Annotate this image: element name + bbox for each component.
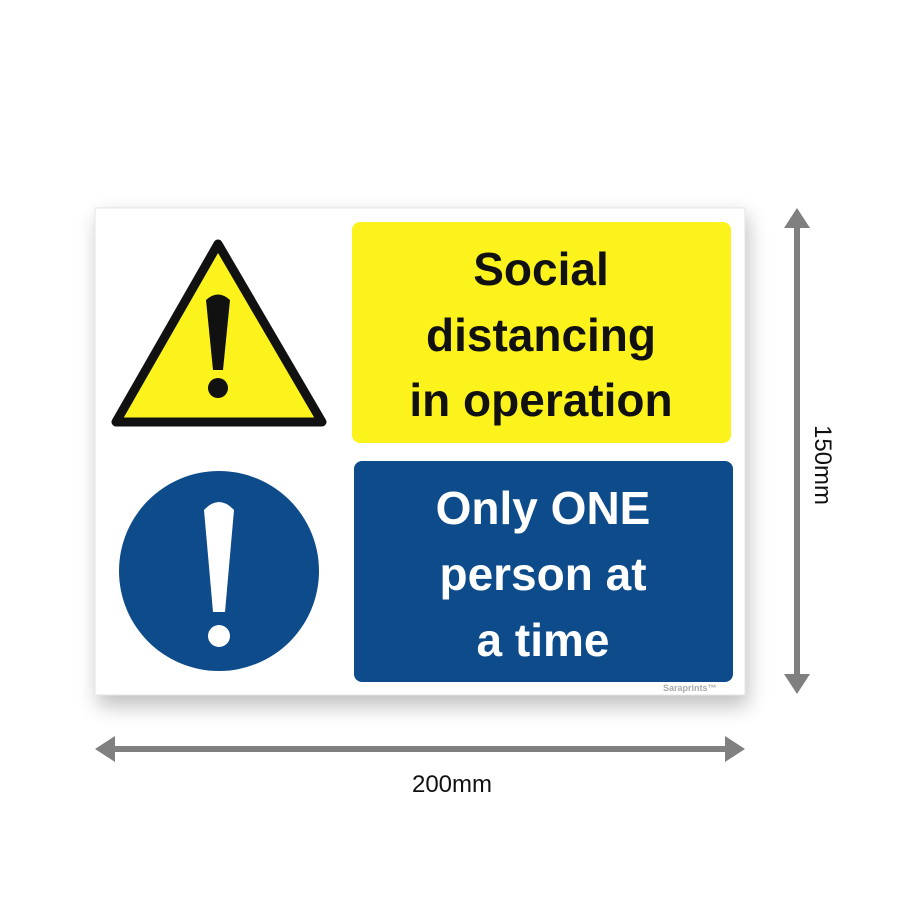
arrow: width <box>95 736 745 762</box>
panel: blue text: Only ONE <box>436 482 650 534</box>
panel: yellow text: distancing <box>426 309 656 361</box>
panel: yellow text: Social <box>473 243 609 295</box>
sign shadow <box>98 216 748 706</box>
icon: mandatory circle <box>119 471 319 671</box>
sign board <box>95 208 745 695</box>
panel: blue text: person at <box>439 548 647 600</box>
panel: blue text: a time <box>477 614 609 666</box>
label: 150mm: 150mm <box>809 425 836 505</box>
panel: yellow text: in operation <box>409 374 673 426</box>
brand mark: Saraprints™ <box>663 683 717 693</box>
label: 200mm: 200mm <box>412 771 492 798</box>
arrow: height <box>784 208 810 694</box>
panel: yellow text <box>352 222 731 443</box>
panel: blue text <box>354 461 733 682</box>
icon: warning triangle <box>116 244 322 422</box>
